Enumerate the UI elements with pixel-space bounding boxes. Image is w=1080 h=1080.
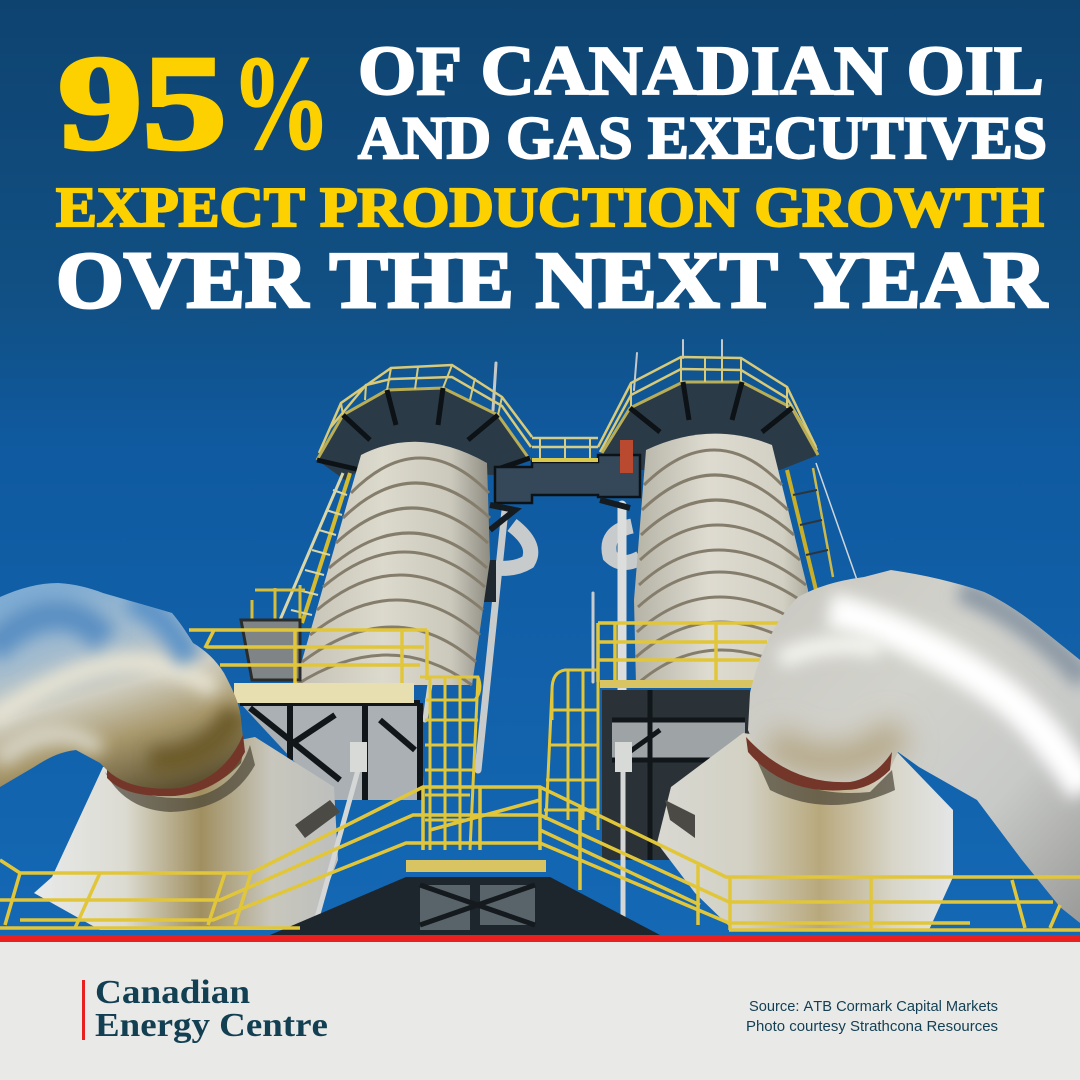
logo: Canadian Energy Centre: Energy Centre bbox=[95, 1005, 328, 1044]
small upper left platform bbox=[241, 585, 305, 680]
left tower platform bbox=[317, 365, 532, 480]
bridge between towers bbox=[482, 438, 640, 602]
source credit bbox=[746, 998, 998, 1035]
left cage ladder bbox=[420, 677, 480, 850]
right pipe bbox=[746, 570, 1080, 923]
stat: 95%: 95 bbox=[58, 29, 227, 178]
tower ladders bbox=[280, 463, 857, 623]
small silver pipes between towers bbox=[495, 525, 640, 568]
logo bar bbox=[82, 980, 85, 1040]
right lower structure bbox=[598, 623, 781, 860]
pole lamp left bbox=[315, 742, 367, 925]
logo: Canadian Energy Centre: Canadian bbox=[95, 972, 250, 1011]
stat: 95% bbox=[58, 27, 331, 178]
yellow deck railings bbox=[0, 787, 1080, 930]
left cone vessel bbox=[34, 737, 338, 930]
source credit: Source: ATB Cormark Capital Markets bbox=[749, 998, 998, 1015]
service poles bbox=[425, 340, 722, 770]
red divider bbox=[0, 935, 1080, 942]
headline line 2: AND GAS EXECUTIVES bbox=[358, 106, 1047, 172]
left tower bbox=[295, 442, 490, 685]
left pipe bbox=[0, 583, 245, 796]
headline line 1: OF CANADIAN OIL bbox=[358, 31, 1044, 109]
stat: 95%: % bbox=[231, 27, 331, 178]
right tower platform bbox=[598, 357, 818, 475]
valve details bbox=[295, 800, 695, 838]
pole lamp right bbox=[615, 742, 632, 927]
photo: industrial towers and pipes bbox=[0, 340, 1080, 935]
flange shadows bbox=[105, 745, 895, 812]
headline line 3: EXPECT PRODUCTION GROWTH bbox=[56, 176, 1044, 238]
source credit: Photo courtesy Strathcona Resources bbox=[746, 1018, 998, 1035]
logo: Canadian Energy Centre bbox=[95, 972, 328, 1044]
headline line 4: OVER THE NEXT YEAR bbox=[56, 236, 1048, 325]
right cage ladder bbox=[544, 670, 598, 830]
right cone vessel bbox=[657, 733, 953, 930]
right tower bbox=[634, 434, 820, 685]
left lower structure bbox=[189, 630, 427, 800]
headline bbox=[56, 27, 1048, 325]
central dark base bbox=[270, 860, 660, 935]
footer panel bbox=[0, 942, 1080, 1080]
